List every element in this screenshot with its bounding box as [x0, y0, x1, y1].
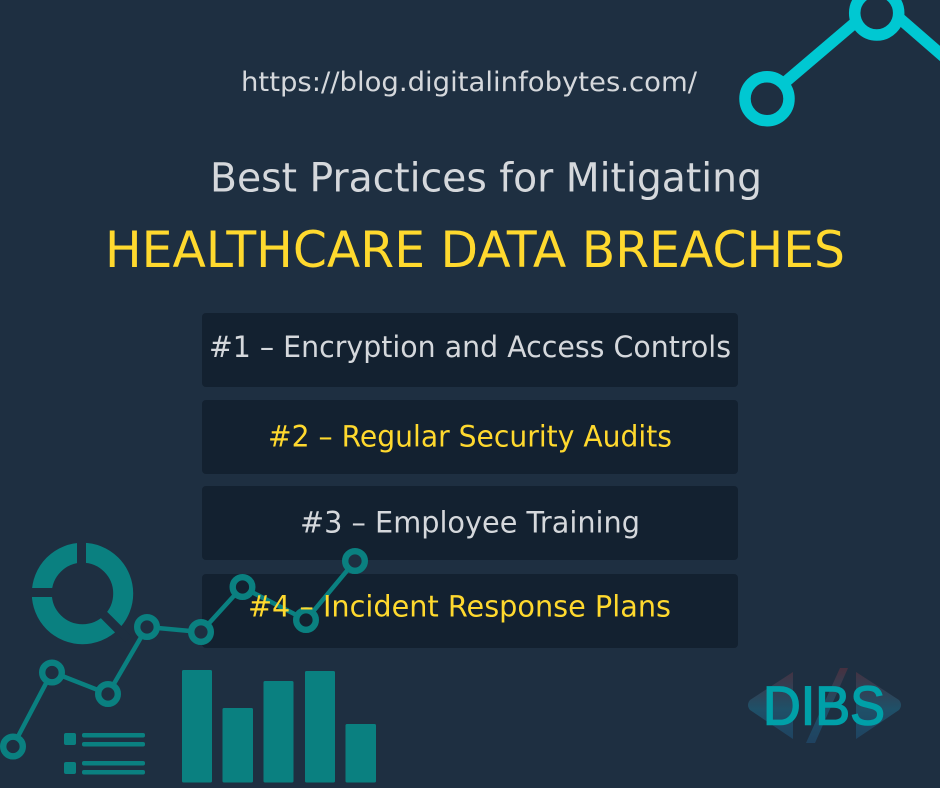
panel: practice 2: [202, 400, 738, 474]
chart: bar chart: [182, 670, 376, 782]
panel: practice 4 background: [202, 574, 738, 648]
logo: DIBS: DIBS: [763, 674, 885, 736]
panel: practice 2: #2 – Regular Security Audits: [268, 420, 672, 454]
panel: practice 3: [202, 486, 738, 560]
headline: HEALTHCARE DATA BREACHES: [105, 221, 845, 279]
panel: practice 1: [202, 313, 738, 387]
panel: practice 1: #1 – Encryption and Access Controls: [209, 330, 731, 364]
website url: https://blog.digitalinfobytes.com/: [241, 67, 698, 98]
title line: Best Practices for Mitigating: [210, 156, 762, 202]
logo: DIBS: [748, 668, 901, 743]
chart: donut: [26, 536, 128, 639]
practice 4 label: #4 – Incident Response Plans: [248, 590, 671, 624]
panel: practice 3: #3 – Employee Training: [300, 506, 640, 540]
chart: teal line chart: [3, 551, 365, 756]
icon: cyan line chart top right: [745, 0, 940, 121]
icon: legend list: [64, 733, 145, 774]
